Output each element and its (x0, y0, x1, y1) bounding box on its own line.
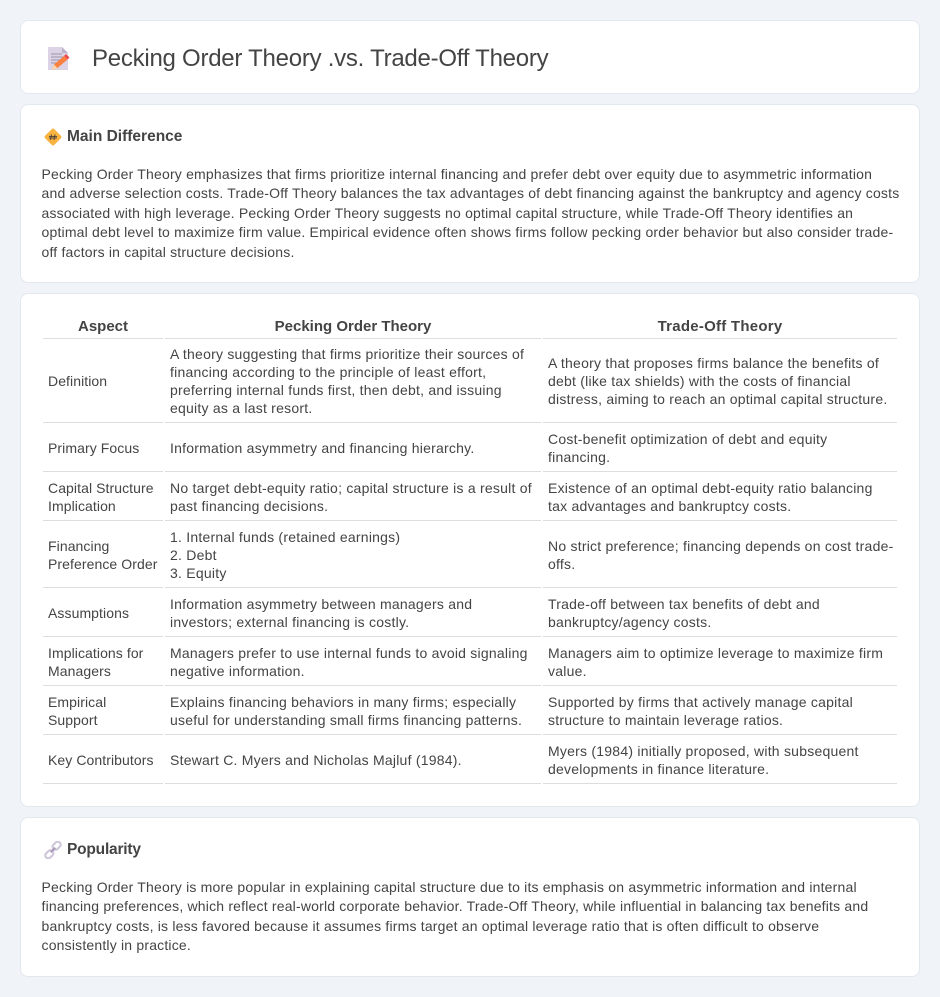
comparison table: negative information. (170, 662, 305, 678)
text block: main difference (42, 166, 899, 260)
comparison table: Stewart C. Myers and Nicholas Majluf (1984). (170, 752, 462, 768)
table header (43, 318, 897, 339)
comparison table: Managers prefer to use internal funds to avoid signaling (170, 644, 528, 660)
text block: main difference: associated with high leverage. Pecking Order Theory suggests no optimal capital structure, while Trade-Off Theory identifies an (42, 205, 853, 221)
comparison table: Definition (48, 372, 107, 388)
title: Pecking Order Theory .vs. Trade-Off Theory (92, 45, 548, 72)
table header: Pecking Order Theory (275, 318, 431, 335)
comparison table: Information asymmetry and financing hierarchy. (170, 440, 474, 456)
comparison table: No target debt-equity ratio; capital structure is a result of (170, 480, 532, 496)
text block: main difference: optimal debt level to maximize firm value. Empirical evidence often shows firms follow pecking order behavior but also consider trade- (42, 224, 893, 240)
comparison table: Existence of an optimal debt-equity ratio balancing (548, 480, 873, 496)
comparison table: tax advantages and bankruptcy costs. (548, 498, 791, 514)
comparison table: Myers (1984) initially proposed, with subsequent (548, 742, 859, 758)
panel: popularity (20, 817, 920, 977)
table header: Trade-Off Theory (658, 318, 782, 335)
comparison table: Key Contributors (48, 752, 154, 768)
icon: document with pencil (48, 47, 70, 70)
comparison table: Implication (48, 498, 116, 514)
comparison table: investors; external financing is costly. (170, 614, 409, 630)
table header: Aspect (78, 318, 128, 335)
comparison table: Information asymmetry between managers and (170, 596, 472, 612)
comparison table: A theory that proposes firms balance the benefits of (548, 354, 879, 370)
text block: popularity: consistently in practice. (42, 937, 191, 953)
comparison table: Implications for (48, 644, 143, 660)
comparison table: Capital Structure (48, 480, 154, 496)
icon: chain link (44, 841, 62, 859)
text block: main difference: and adverse selection costs. Trade-Off Theory balances the tax advantages of debt financing against the bankruptcy and agency costs (42, 185, 899, 201)
comparison table: past financing decisions. (170, 498, 328, 514)
comparison table: Explains financing behaviors in many firms; especially (170, 694, 516, 710)
text block: popularity: Pecking Order Theory is more popular in explaining capital structure due to its emphasis on asymmetric information and internal (42, 878, 857, 894)
heading: main difference: Main Difference (67, 128, 182, 145)
comparison table: structure to maintain leverage ratios. (548, 712, 783, 728)
comparison table: Managers aim to optimize leverage to maximize firm (548, 644, 883, 660)
panel: title card (20, 20, 920, 94)
panel: main difference (20, 104, 920, 283)
text block: main difference: Pecking Order Theory emphasizes that firms prioritize internal financing and prefer debt over equity due to asymmetric information (42, 166, 872, 182)
comparison table: Primary Focus (48, 440, 139, 456)
comparison table: equity as a last resort. (170, 400, 312, 416)
comparison table: Empirical (48, 694, 106, 710)
comparison table: Preference Order (48, 556, 157, 572)
text block: main difference: off factors in capital structure decisions. (42, 244, 295, 260)
comparison table: Trade-off between tax benefits of debt and (548, 596, 820, 612)
comparison table: offs. (548, 556, 575, 572)
comparison table: 1. Internal funds (retained earnings) (170, 528, 400, 544)
text block: popularity: financing preferences, which reflect real-world corporate behavior. Trade-Off Theory, while influential in balancing tax benefits and (42, 898, 868, 914)
comparison table: financing. (548, 448, 610, 464)
comparison table: Financing (48, 538, 109, 554)
comparison table: preferring internal funds first, then debt, and issuing (170, 382, 502, 398)
comparison table: useful for understanding small firms financing patterns. (170, 712, 522, 728)
comparison table: A theory suggesting that firms prioritize their sources of (170, 346, 524, 362)
comparison table: financing according to the principle of least effort, (170, 364, 486, 380)
comparison table: Assumptions (48, 604, 129, 620)
comparison table: developments in finance literature. (548, 760, 769, 776)
comparison table: bankruptcy/agency costs. (548, 614, 712, 630)
text block: popularity: bankruptcy costs, is less favored because it assumes firms target an optimal leverage ratio that is often difficult to observe (42, 918, 819, 934)
comparison table: value. (548, 662, 587, 678)
comparison table: distress, aiming to reach an optimal capital structure. (548, 390, 887, 406)
panel: comparison table (20, 293, 920, 807)
heading: popularity: Popularity (67, 841, 141, 858)
comparison table: Support (48, 712, 98, 728)
comparison table: Managers (48, 662, 111, 678)
comparison table: 3. Equity (170, 564, 227, 580)
comparison table: 2. Debt (170, 546, 217, 562)
comparison table: Supported by firms that actively manage capital (548, 694, 853, 710)
comparison table: No strict preference; financing depends on cost trade- (548, 538, 894, 554)
comparison table (43, 318, 897, 784)
comparison table: debt (like tax shields) with the costs of financial (548, 372, 851, 388)
text block: popularity (42, 878, 868, 953)
icon: orange diamond (44, 128, 62, 146)
comparison table: Cost-benefit optimization of debt and equity (548, 430, 827, 446)
